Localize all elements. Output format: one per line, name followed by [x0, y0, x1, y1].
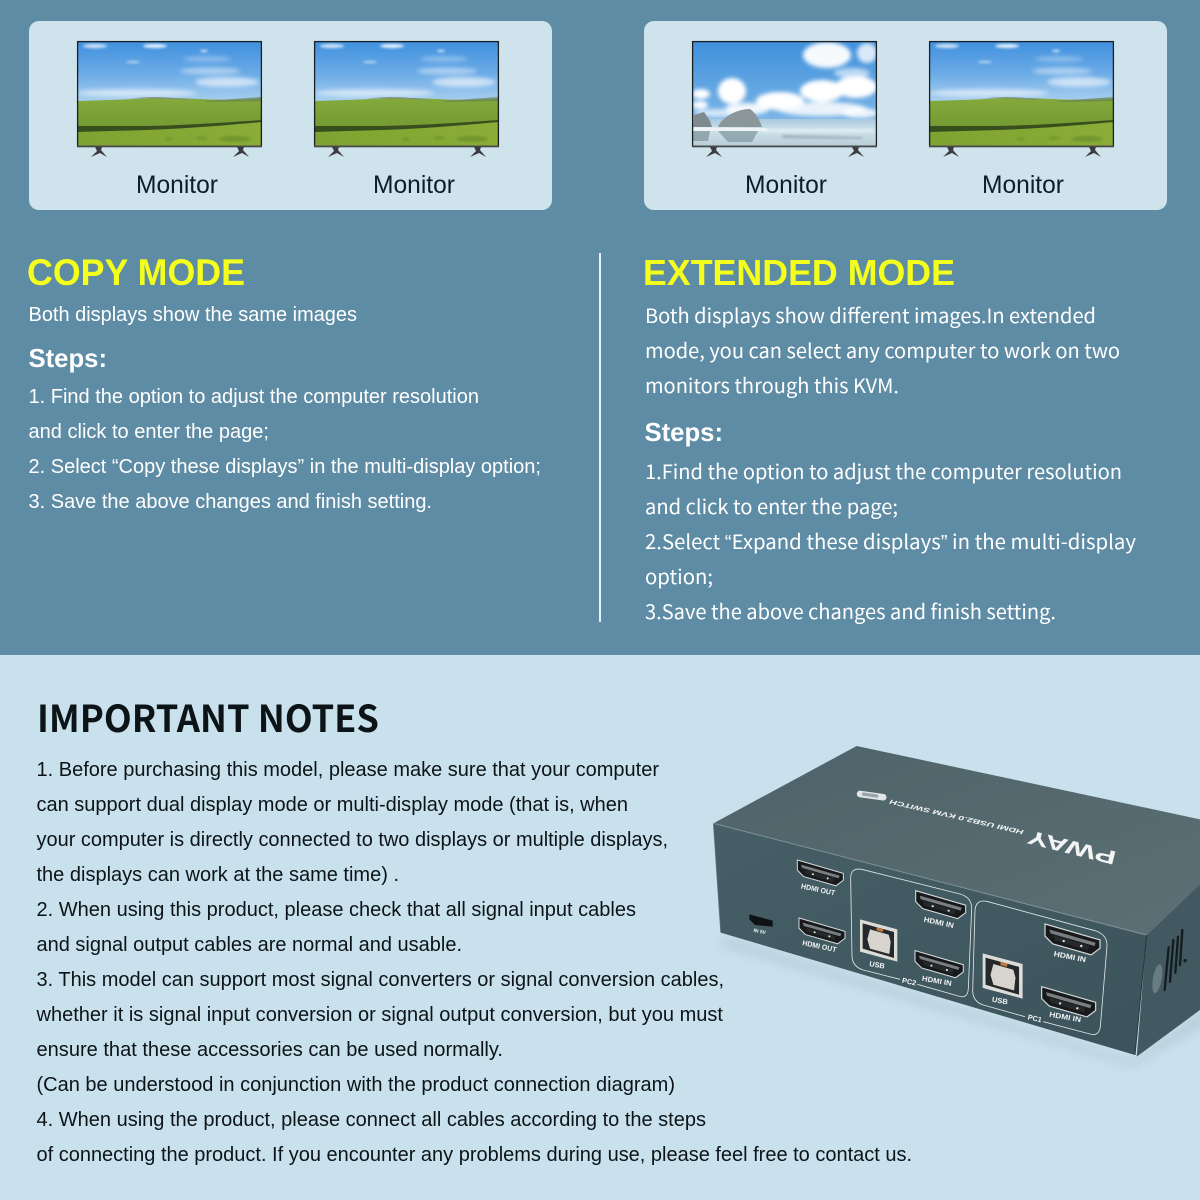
text block: copy mode instructions: Both displays show the same images	[28, 304, 357, 326]
label: monitor: Monitor	[136, 171, 218, 199]
monitor: meadow display	[929, 41, 1114, 157]
port labels: HDMI IN	[1053, 949, 1087, 964]
text block: important notes: 2. When using this product, please check that all signal input cables	[36, 899, 636, 921]
bottom background	[0, 655, 1200, 1200]
text block: extended mode instructions: and click to enter the page;	[645, 491, 898, 520]
right side face	[1137, 884, 1200, 1057]
brand printed on top	[856, 790, 1119, 868]
text block: important notes: (Can be understood in conjunction with the product connection diagram)	[36, 1074, 675, 1096]
port labels	[753, 881, 1087, 1024]
text block: important notes: and signal output cables are normal and usable.	[36, 934, 462, 956]
text block: important notes: ensure that these accessories can be used normally.	[36, 1039, 503, 1061]
port labels: HDMI OUT	[800, 881, 837, 898]
text block: copy mode instructions: 3. Save the above changes and finish setting.	[28, 491, 432, 513]
port labels: HDMI OUT	[802, 938, 838, 954]
label: monitor: Monitor	[982, 171, 1064, 199]
heading: copy mode: COPY MODE	[27, 252, 245, 293]
top face	[713, 746, 1200, 935]
brand printed on top: PWAY	[1025, 825, 1119, 868]
port labels: HDMI IN	[1049, 1010, 1082, 1024]
label: monitor: Monitor	[373, 171, 455, 199]
text block: important notes	[35, 759, 912, 1166]
text block: extended mode instructions: monitors through this KVM.	[645, 370, 899, 399]
port labels: IN 5V	[753, 928, 767, 936]
port labels: USB	[869, 959, 885, 971]
top background	[0, 0, 1200, 655]
port labels: USB	[991, 995, 1009, 1006]
text block: important notes: your computer is directly connected to two displays or multiple displays,	[36, 829, 668, 851]
heading: extended mode: EXTENDED MODE	[643, 252, 955, 293]
text block: extended mode instructions: 2.Select “Expand these displays” in the multi-display	[645, 526, 1137, 555]
text block: copy mode instructions	[28, 304, 541, 513]
text block: copy mode instructions: 2. Select “Copy these displays” in the multi-display option;	[28, 456, 541, 478]
text block: important notes: 3. This model can support most signal converters or signal conversion cables,	[36, 969, 724, 991]
group outline: PC1	[973, 901, 1107, 1035]
text block: important notes: of connecting the product. If you encounter any problems during use, please feel free to contact us.	[36, 1144, 912, 1166]
ports	[797, 860, 843, 886]
divider	[599, 253, 601, 622]
monitor: seascape display	[692, 41, 878, 157]
text block: extended mode instructions: Steps:	[644, 417, 723, 447]
monitor: left copy display	[77, 41, 262, 157]
text block: extended mode instructions: 3.Save the above changes and finish setting.	[645, 596, 1056, 625]
text block: copy mode instructions: Steps:	[28, 343, 107, 373]
vent slots on side	[1165, 930, 1182, 990]
text block: extended mode instructions: option;	[645, 561, 713, 590]
text block: important notes: 1. Before purchasing this model, please make sure that your computer	[36, 759, 659, 781]
port labels: PC1	[1027, 1012, 1043, 1024]
text block: extended mode instructions: Both displays show different images.In extended	[645, 300, 1096, 329]
front face	[713, 823, 1147, 1055]
panel: extended mode monitors	[644, 21, 1167, 210]
label: monitor: Monitor	[745, 171, 827, 199]
port labels: HDMI IN	[923, 915, 955, 930]
product image: KVM switch	[713, 746, 1200, 1067]
panel: copy mode monitors	[29, 21, 552, 210]
text block: extended mode instructions: mode, you can select any computer to work on two	[645, 335, 1120, 364]
text block: copy mode instructions: and click to enter the page;	[28, 421, 269, 443]
monitor: right copy display	[314, 41, 499, 157]
text block: extended mode instructions: 1.Find the option to adjust the computer resolution	[645, 456, 1122, 485]
text block: extended mode instructions	[644, 300, 1137, 625]
port labels: HDMI IN	[921, 974, 952, 988]
text block: important notes: whether it is signal input conversion or signal output conversion, but you must	[35, 1004, 723, 1026]
port labels: PC2	[901, 976, 917, 988]
text block: copy mode instructions: 1. Find the option to adjust the computer resolution	[28, 386, 479, 408]
text block: important notes: the displays can work at the same time) .	[36, 864, 399, 886]
text block: important notes: can support dual display mode or multi-display mode (that is, when	[36, 794, 628, 816]
group outline: PC2	[851, 869, 972, 997]
brand printed on top: HDMI USB2.0 KVM SWITCH	[888, 797, 1024, 835]
heading: important notes: IMPORTANT NOTES	[37, 689, 379, 743]
text block: important notes: 4. When using the product, please connect all cables according to the steps	[36, 1109, 706, 1131]
